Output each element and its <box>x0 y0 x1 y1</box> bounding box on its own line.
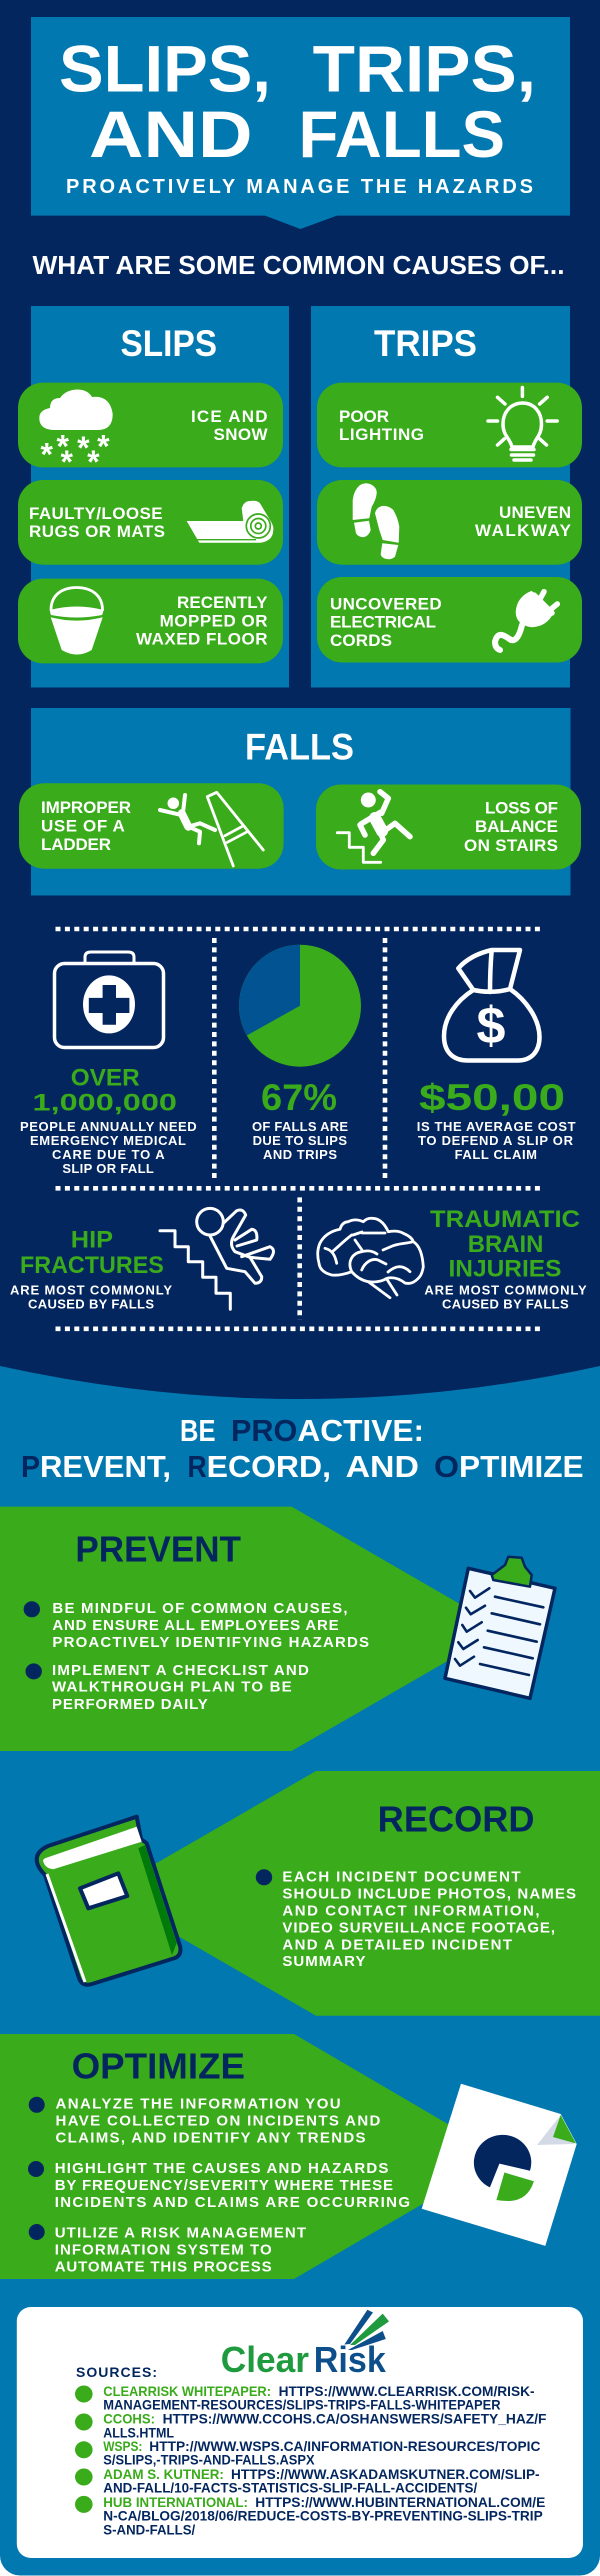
title: AND <box>89 97 253 171</box>
label: UNEVEN <box>499 503 571 522</box>
description: AND TRIPS <box>263 1147 337 1162</box>
description: FALL CLAIM <box>455 1147 537 1162</box>
icon: snow cloud: * <box>77 430 90 466</box>
description: CAUSED BY FALLS <box>442 1296 569 1311</box>
source: adam s. kutner: AND-FALL/10-FACTS-STATISTICS-SLIP-FALL-ACCIDENTS/ <box>103 2480 477 2496</box>
label: MOPPED OR <box>160 611 268 630</box>
description: CAUSED BY FALLS <box>28 1296 154 1311</box>
bullet three <box>29 2224 306 2275</box>
optimize heading: OPTIMIZE <box>72 2046 245 2086</box>
cause: uneven walkway <box>317 480 582 565</box>
icon: rolled rug <box>187 501 273 543</box>
source: adam s. kutner: ADAM S. KUTNER: <box>103 2466 224 2482</box>
cause: ice and snow <box>18 383 283 480</box>
bullet three: INFORMATION SYSTEM TO <box>55 2241 272 2258</box>
cause: electrical cords <box>317 577 582 662</box>
bullet two: IMPLEMENT A CHECKLIST AND <box>52 1662 309 1679</box>
label <box>475 503 572 540</box>
label: FAULTY/LOOSE <box>29 504 163 523</box>
pie chart <box>239 945 361 1067</box>
icon: green logbook <box>37 1817 180 1985</box>
description <box>10 1282 172 1311</box>
bullet three: UTILIZE A RISK MANAGEMENT <box>55 2224 306 2241</box>
label: ON STAIRS <box>464 836 558 855</box>
bullet one: AND ENSURE ALL EMPLOYEES ARE <box>52 1617 339 1634</box>
description: SLIP OR FALL <box>62 1161 154 1176</box>
description <box>20 1119 197 1176</box>
stat: 67% <box>239 945 361 1162</box>
trips heading: TRIPS <box>374 323 477 364</box>
section heading: be proactive: REVENT, <box>40 1449 171 1484</box>
header banner <box>31 17 570 229</box>
bullet three: AUTOMATE THIS PROCESS <box>55 2258 272 2275</box>
bullet two: INCIDENTS AND CLAIMS ARE OCCURRING <box>55 2194 410 2211</box>
label: WAXED FLOOR <box>136 630 268 649</box>
label: UNCOVERED <box>330 594 442 613</box>
label <box>464 799 558 855</box>
icon: brain <box>318 1218 423 1298</box>
title: FALLS <box>298 97 505 171</box>
label: USE OF A <box>41 816 125 835</box>
label <box>136 593 268 649</box>
label: LIGHTING <box>339 425 424 444</box>
heading: TRAUMATIC <box>430 1206 580 1233</box>
icon: plug and cord <box>495 591 557 650</box>
label <box>330 594 442 650</box>
panel: falls <box>19 708 581 896</box>
logo: ClearRisk: Risk <box>314 2339 387 2380</box>
icon: first aid kit <box>54 952 164 1048</box>
label: LADDER <box>41 835 111 854</box>
value: $50,00 <box>419 1077 565 1118</box>
source: ccohs: HTTPS://WWW.CCOHS.CA/OSHANSWERS/SAFETY_HAZ/F <box>163 2410 547 2426</box>
section heading: be proactive: R <box>188 1449 207 1484</box>
source: clearrisk whitepaper: CLEARRISK WHITEPAPER: <box>103 2383 271 2399</box>
heading: FRACTURES <box>20 1252 164 1279</box>
section heading: be proactive: ACTIVE: <box>297 1413 424 1448</box>
section heading: common causes: WHAT ARE SOME COMMON CAUSES OF... <box>32 250 564 280</box>
icon: footprints <box>353 483 399 559</box>
cause: rugs or mats <box>18 480 283 565</box>
heading <box>430 1206 580 1283</box>
panel: prevent <box>0 1507 555 1751</box>
title: SLIPS, <box>59 32 271 106</box>
description: ARE MOST COMMONLY <box>10 1282 172 1298</box>
stat: $50,00 <box>417 950 576 1162</box>
source: clearrisk whitepaper: MANAGEMENT-RESOURCES/SLIPS-TRIPS-FALLS-WHITEPAPER <box>103 2397 501 2413</box>
label <box>339 407 424 444</box>
stat: over 1,000,000 <box>20 952 197 1176</box>
bullet one <box>24 1600 369 1651</box>
value: 67% <box>261 1077 337 1118</box>
icon: person falling on stairs <box>337 792 410 862</box>
label <box>29 504 165 541</box>
cause: improper ladder use <box>19 783 284 869</box>
sources heading: SOURCES: <box>76 2364 157 2380</box>
icon: bucket <box>50 588 103 654</box>
source: ccohs <box>75 2410 547 2440</box>
icon: snow cloud: * <box>56 428 69 464</box>
source: wsps <box>75 2438 540 2468</box>
label: LOSS OF <box>485 799 558 818</box>
label: IMPROPER <box>41 798 131 817</box>
label: WALKWAY <box>475 521 572 540</box>
bullet one: HAVE COLLECTED ON INCIDENTS AND <box>56 2113 381 2130</box>
description: TO DEFEND A SLIP OR <box>418 1133 574 1148</box>
cause: loss of balance on stairs <box>316 784 581 870</box>
source: hub international: S-AND-FALLS/ <box>103 2522 195 2538</box>
description: EMERGENCY MEDICAL <box>30 1133 186 1148</box>
description: CARE DUE TO A <box>52 1147 165 1162</box>
title <box>59 32 536 171</box>
bullet two: HIGHLIGHT THE CAUSES AND HAZARDS <box>55 2160 388 2177</box>
icon: snow cloud: * <box>40 436 53 472</box>
bullet <box>256 1869 576 1970</box>
slips heading: SLIPS <box>120 323 217 364</box>
label: CORDS <box>330 631 392 650</box>
description: OF FALLS ARE <box>252 1119 348 1134</box>
description: IS THE AVERAGE COST <box>417 1119 576 1134</box>
bullet one: BE MINDFUL OF COMMON CAUSES, <box>52 1600 348 1617</box>
label: RUGS OR MATS <box>29 522 165 541</box>
logo: ClearRisk <box>221 2310 389 2380</box>
value <box>32 1064 177 1117</box>
source: clearrisk whitepaper: HTTPS://WWW.CLEARRISK.COM/RISK- <box>279 2383 535 2399</box>
bullet two: BY FREQUENCY/SEVERITY WHERE THESE <box>55 2177 393 2194</box>
heading <box>20 1227 164 1279</box>
section heading: be proactive: P <box>21 1449 40 1484</box>
heading: HIP <box>71 1227 113 1254</box>
bullet: VIDEO SURVEILLANCE FOOTAGE, <box>282 1919 555 1936</box>
label: BALANCE <box>475 817 558 836</box>
icon: money bag <box>444 950 540 1060</box>
title: TRIPS, <box>313 32 536 106</box>
heading: INJURIES <box>448 1256 561 1283</box>
icon: light bulb <box>488 388 557 460</box>
icon: figure falling down stairs <box>160 1208 274 1309</box>
label: SNOW <box>214 425 268 444</box>
bullet one: CLAIMS, AND IDENTIFY ANY TRENDS <box>56 2130 366 2147</box>
section heading: be proactive: PTIMIZE <box>459 1449 584 1484</box>
source: ccohs: ALLS.HTML <box>103 2424 174 2440</box>
bullet: SUMMARY <box>282 1953 366 1970</box>
source: hub international: HUB INTERNATIONAL: <box>103 2494 248 2510</box>
panel: slips <box>18 306 289 688</box>
section heading: be proactive: ECORD, <box>207 1449 331 1484</box>
heading: BRAIN <box>468 1231 543 1258</box>
icon: money bag: $ <box>477 997 506 1055</box>
section heading: be proactive: AND <box>346 1449 419 1484</box>
label: ELECTRICAL <box>330 613 436 632</box>
icon: snow cloud: * <box>60 444 73 480</box>
description <box>424 1282 587 1311</box>
source: wsps: HTTP://WWW.WSPS.CA/INFORMATION-RESOURCES/TOPIC <box>149 2438 540 2454</box>
source: hub international <box>75 2494 545 2538</box>
panel: record <box>37 1771 600 2016</box>
section heading: be proactive: PRO <box>231 1413 297 1448</box>
bullet two <box>26 1662 309 1713</box>
bullet: SHOULD INCLUDE PHOTOS, NAMES <box>282 1886 576 1903</box>
source: wsps: S/SLIPS,-TRIPS-AND-FALLS.ASPX <box>103 2452 315 2468</box>
logo: ClearRisk: Clear <box>221 2339 309 2380</box>
stat: hip fractures <box>10 1208 274 1311</box>
icon: clipboard checklist <box>445 1557 555 1698</box>
dotted grid of statistics <box>56 929 544 1329</box>
label: POOR <box>339 407 389 426</box>
bullet two: PERFORMED DAILY <box>52 1696 208 1713</box>
bullet two: WALKTHROUGH PLAN TO BE <box>52 1679 292 1696</box>
source: hub international: N-CA/BLOG/2018/06/REDUCE-COSTS-BY-PREVENTING-SLIPS-TRIP <box>103 2508 543 2524</box>
panel: optimize <box>0 2034 577 2279</box>
description: ARE MOST COMMONLY <box>424 1282 587 1298</box>
source: clearrisk whitepaper <box>75 2383 535 2413</box>
description: PEOPLE ANNUALLY NEED <box>20 1119 197 1134</box>
icon: snow cloud: * <box>87 444 100 480</box>
description <box>252 1119 348 1162</box>
icon: document with pie chart <box>422 2084 577 2246</box>
panel: sources <box>17 2307 583 2558</box>
icon: snow cloud <box>39 390 113 480</box>
source: adam s. kutner: HTTPS://WWW.ASKADAMSKUTNER.COM/SLIP- <box>231 2466 540 2482</box>
cause: poor lighting <box>317 383 582 467</box>
bullet one: ANALYZE THE INFORMATION YOU <box>56 2096 341 2113</box>
value: OVER <box>71 1064 140 1092</box>
bullet one <box>29 2096 381 2147</box>
falls heading: FALLS <box>245 726 354 767</box>
record heading: RECORD <box>378 1798 535 1839</box>
source: hub international: HTTPS://WWW.HUBINTERNATIONAL.COM/E <box>255 2494 545 2510</box>
prevent heading: PREVENT <box>75 1529 241 1570</box>
bullet two <box>28 2160 410 2211</box>
label <box>41 798 131 854</box>
bullet: AND CONTACT INFORMATION, <box>282 1902 540 1920</box>
bullet: AND A DETAILED INCIDENT <box>282 1936 512 1953</box>
section heading: be proactive <box>21 1413 584 1484</box>
description <box>417 1119 576 1162</box>
icon: person falling from ladder <box>160 792 263 866</box>
section heading: be proactive: O <box>434 1449 459 1484</box>
label: RECENTLY <box>177 593 268 612</box>
subtitle: PROACTIVELY MANAGE THE HAZARDS <box>66 176 533 198</box>
source: wsps: WSPS: <box>103 2438 142 2454</box>
label <box>191 407 268 444</box>
panel: trips <box>311 306 582 688</box>
bullet: EACH INCIDENT DOCUMENT <box>282 1869 520 1886</box>
value: 1,000,000 <box>32 1090 177 1117</box>
description: DUE TO SLIPS <box>253 1133 347 1148</box>
bullet one: PROACTIVELY IDENTIFYING HAZARDS <box>52 1634 369 1651</box>
cause: mopped floor <box>18 579 283 663</box>
label: ICE AND <box>191 407 268 426</box>
stat: traumatic brain injuries <box>318 1206 587 1311</box>
icon: snow cloud: * <box>97 428 110 464</box>
source: ccohs: CCOHS: <box>103 2410 155 2426</box>
section heading: be proactive: BE <box>180 1413 216 1448</box>
source: adam s. kutner <box>75 2466 540 2496</box>
